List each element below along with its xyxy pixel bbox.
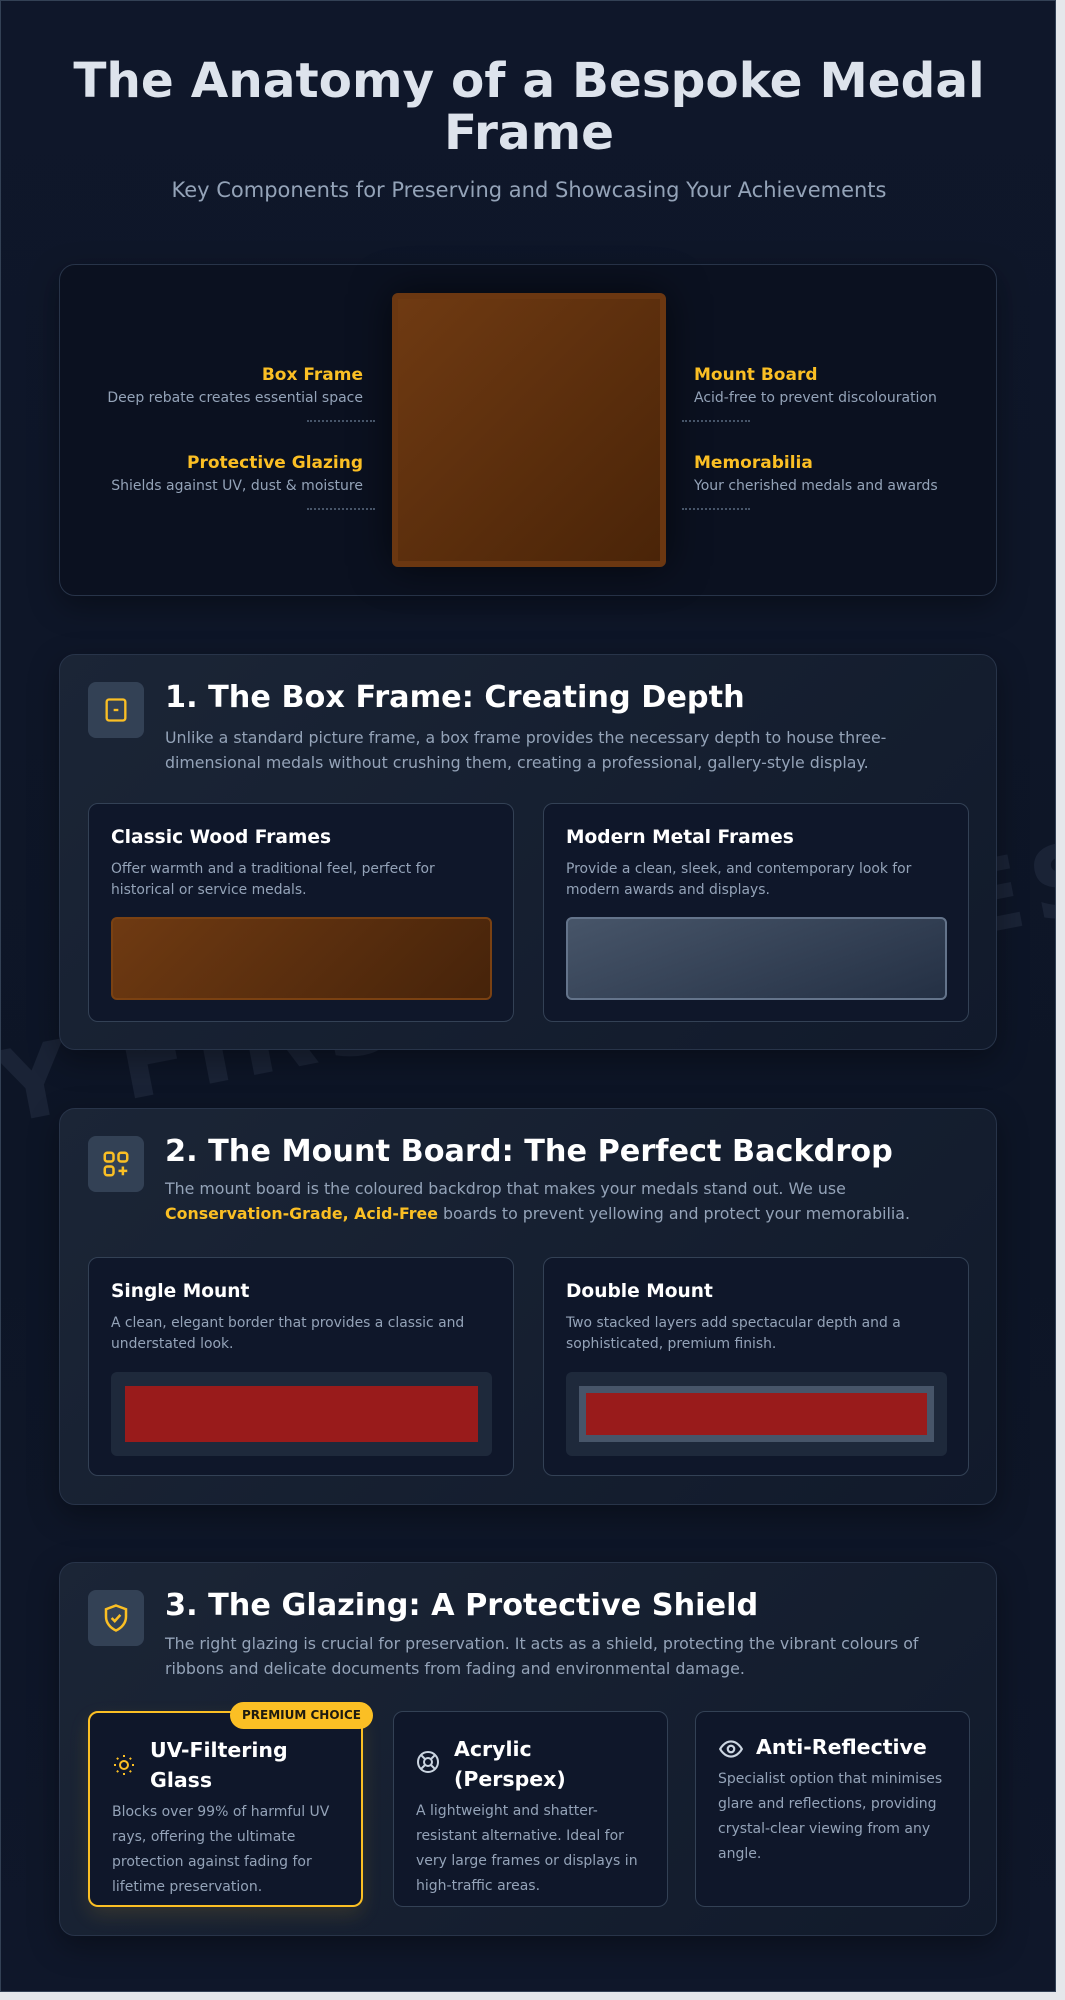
title: Frame	[444, 105, 614, 161]
label: protective glazing: Protective Glazing	[187, 453, 363, 473]
label: mount board: Mount Board	[694, 365, 818, 385]
card: UV glass: Glass	[150, 1768, 212, 1792]
subtitle: Key Components for Preserving and Showcasing Your Achievements	[172, 178, 886, 202]
card: anti-reflective: Specialist option that minimises glare and reflections, providing crystal-clear viewing from any angle.	[718, 1771, 942, 1862]
label: mount board: Acid-free to prevent discolouration	[694, 390, 937, 406]
title	[73, 53, 985, 161]
connector	[307, 420, 375, 422]
label: memorabilia: Memorabilia	[694, 453, 813, 473]
card: UV glass	[88, 1711, 363, 1907]
card: wood frames: Classic Wood Frames	[111, 827, 331, 848]
heading: 2. The Mount Board: The Perfect Backdrop	[165, 1134, 893, 1169]
card: double mount	[543, 1257, 969, 1476]
card: acrylic: A lightweight and shatter-resistant alternative. Ideal for very large frames or displays in high-traffic areas.	[416, 1803, 638, 1894]
panel: hero anatomy diagram	[59, 264, 997, 596]
panel: glazing section	[59, 1562, 997, 1936]
heading: 1. The Box Frame: Creating Depth	[165, 680, 745, 715]
card: single mount: A clean, elegant border that provides a classic and understated look.	[111, 1315, 464, 1352]
label: box frame	[107, 365, 363, 406]
description: The right glazing is crucial for preservation. It acts as a shield, protecting the vibrant colours of ribbons and delicate documents from fading and environmental damage.	[165, 1634, 918, 1678]
card: wood frames: Offer warmth and a traditional feel, perfect for historical or service medals.	[111, 861, 435, 898]
icon: mount	[88, 1136, 144, 1192]
panel: mount board section	[59, 1108, 997, 1505]
connector	[682, 508, 750, 510]
description: The mount board is the coloured backdrop that makes your medals stand out. We use Conservation-Grade, Acid-Free boards to prevent yellowing and protect your memorabilia.	[165, 1179, 910, 1223]
card: double mount: Double Mount	[566, 1281, 713, 1302]
label: box frame: Box Frame	[262, 365, 363, 385]
card: acrylic: (Perspex)	[454, 1767, 566, 1791]
card: wood frames	[88, 803, 514, 1022]
card: double mount: Two stacked layers add spectacular depth and a sophisticated, premium finish.	[566, 1315, 901, 1352]
card: metal frames: Provide a clean, sleek, and contemporary look for modern awards and displays.	[566, 861, 911, 898]
title: The Anatomy of a Bespoke Medal	[73, 53, 985, 109]
icon: lifebuoy	[417, 1751, 439, 1773]
panel: box frame section	[59, 654, 997, 1050]
connector	[307, 508, 375, 510]
card: anti-reflective	[695, 1711, 970, 1907]
card: anti-reflective: Anti-Reflective	[756, 1735, 927, 1759]
label: memorabilia	[694, 453, 938, 494]
icon: shield	[88, 1590, 144, 1646]
badge	[230, 1702, 373, 1729]
card: acrylic: Acrylic	[454, 1737, 532, 1761]
label: protective glazing	[111, 453, 363, 494]
card: metal frames	[543, 803, 969, 1022]
icon: frame	[88, 682, 144, 738]
badge: PREMIUM CHOICE	[242, 1708, 361, 1722]
card: acrylic	[393, 1711, 668, 1907]
connector	[682, 420, 750, 422]
description: Unlike a standard picture frame, a box frame provides the necessary depth to house three-dimensional medals without crushing them, creating a professional, gallery-style display.	[165, 728, 886, 772]
heading: 3. The Glazing: A Protective Shield	[165, 1588, 758, 1623]
icon: eye	[719, 1740, 743, 1758]
card: metal frames: Modern Metal Frames	[566, 827, 794, 848]
label: memorabilia: Your cherished medals and awards	[694, 478, 938, 494]
label: protective glazing: Shields against UV, dust & moisture	[111, 478, 363, 494]
card: UV glass: UV-Filtering	[150, 1738, 288, 1762]
card: single mount: Single Mount	[111, 1281, 249, 1302]
icon: sun	[114, 1755, 134, 1775]
label: mount board	[694, 365, 937, 406]
frame illustration	[392, 293, 666, 567]
card: UV glass: Blocks over 99% of harmful UV rays, offering the ultimate protection against fading for lifetime preservation.	[112, 1804, 329, 1895]
label: box frame: Deep rebate creates essential space	[107, 390, 363, 406]
card: single mount	[88, 1257, 514, 1476]
